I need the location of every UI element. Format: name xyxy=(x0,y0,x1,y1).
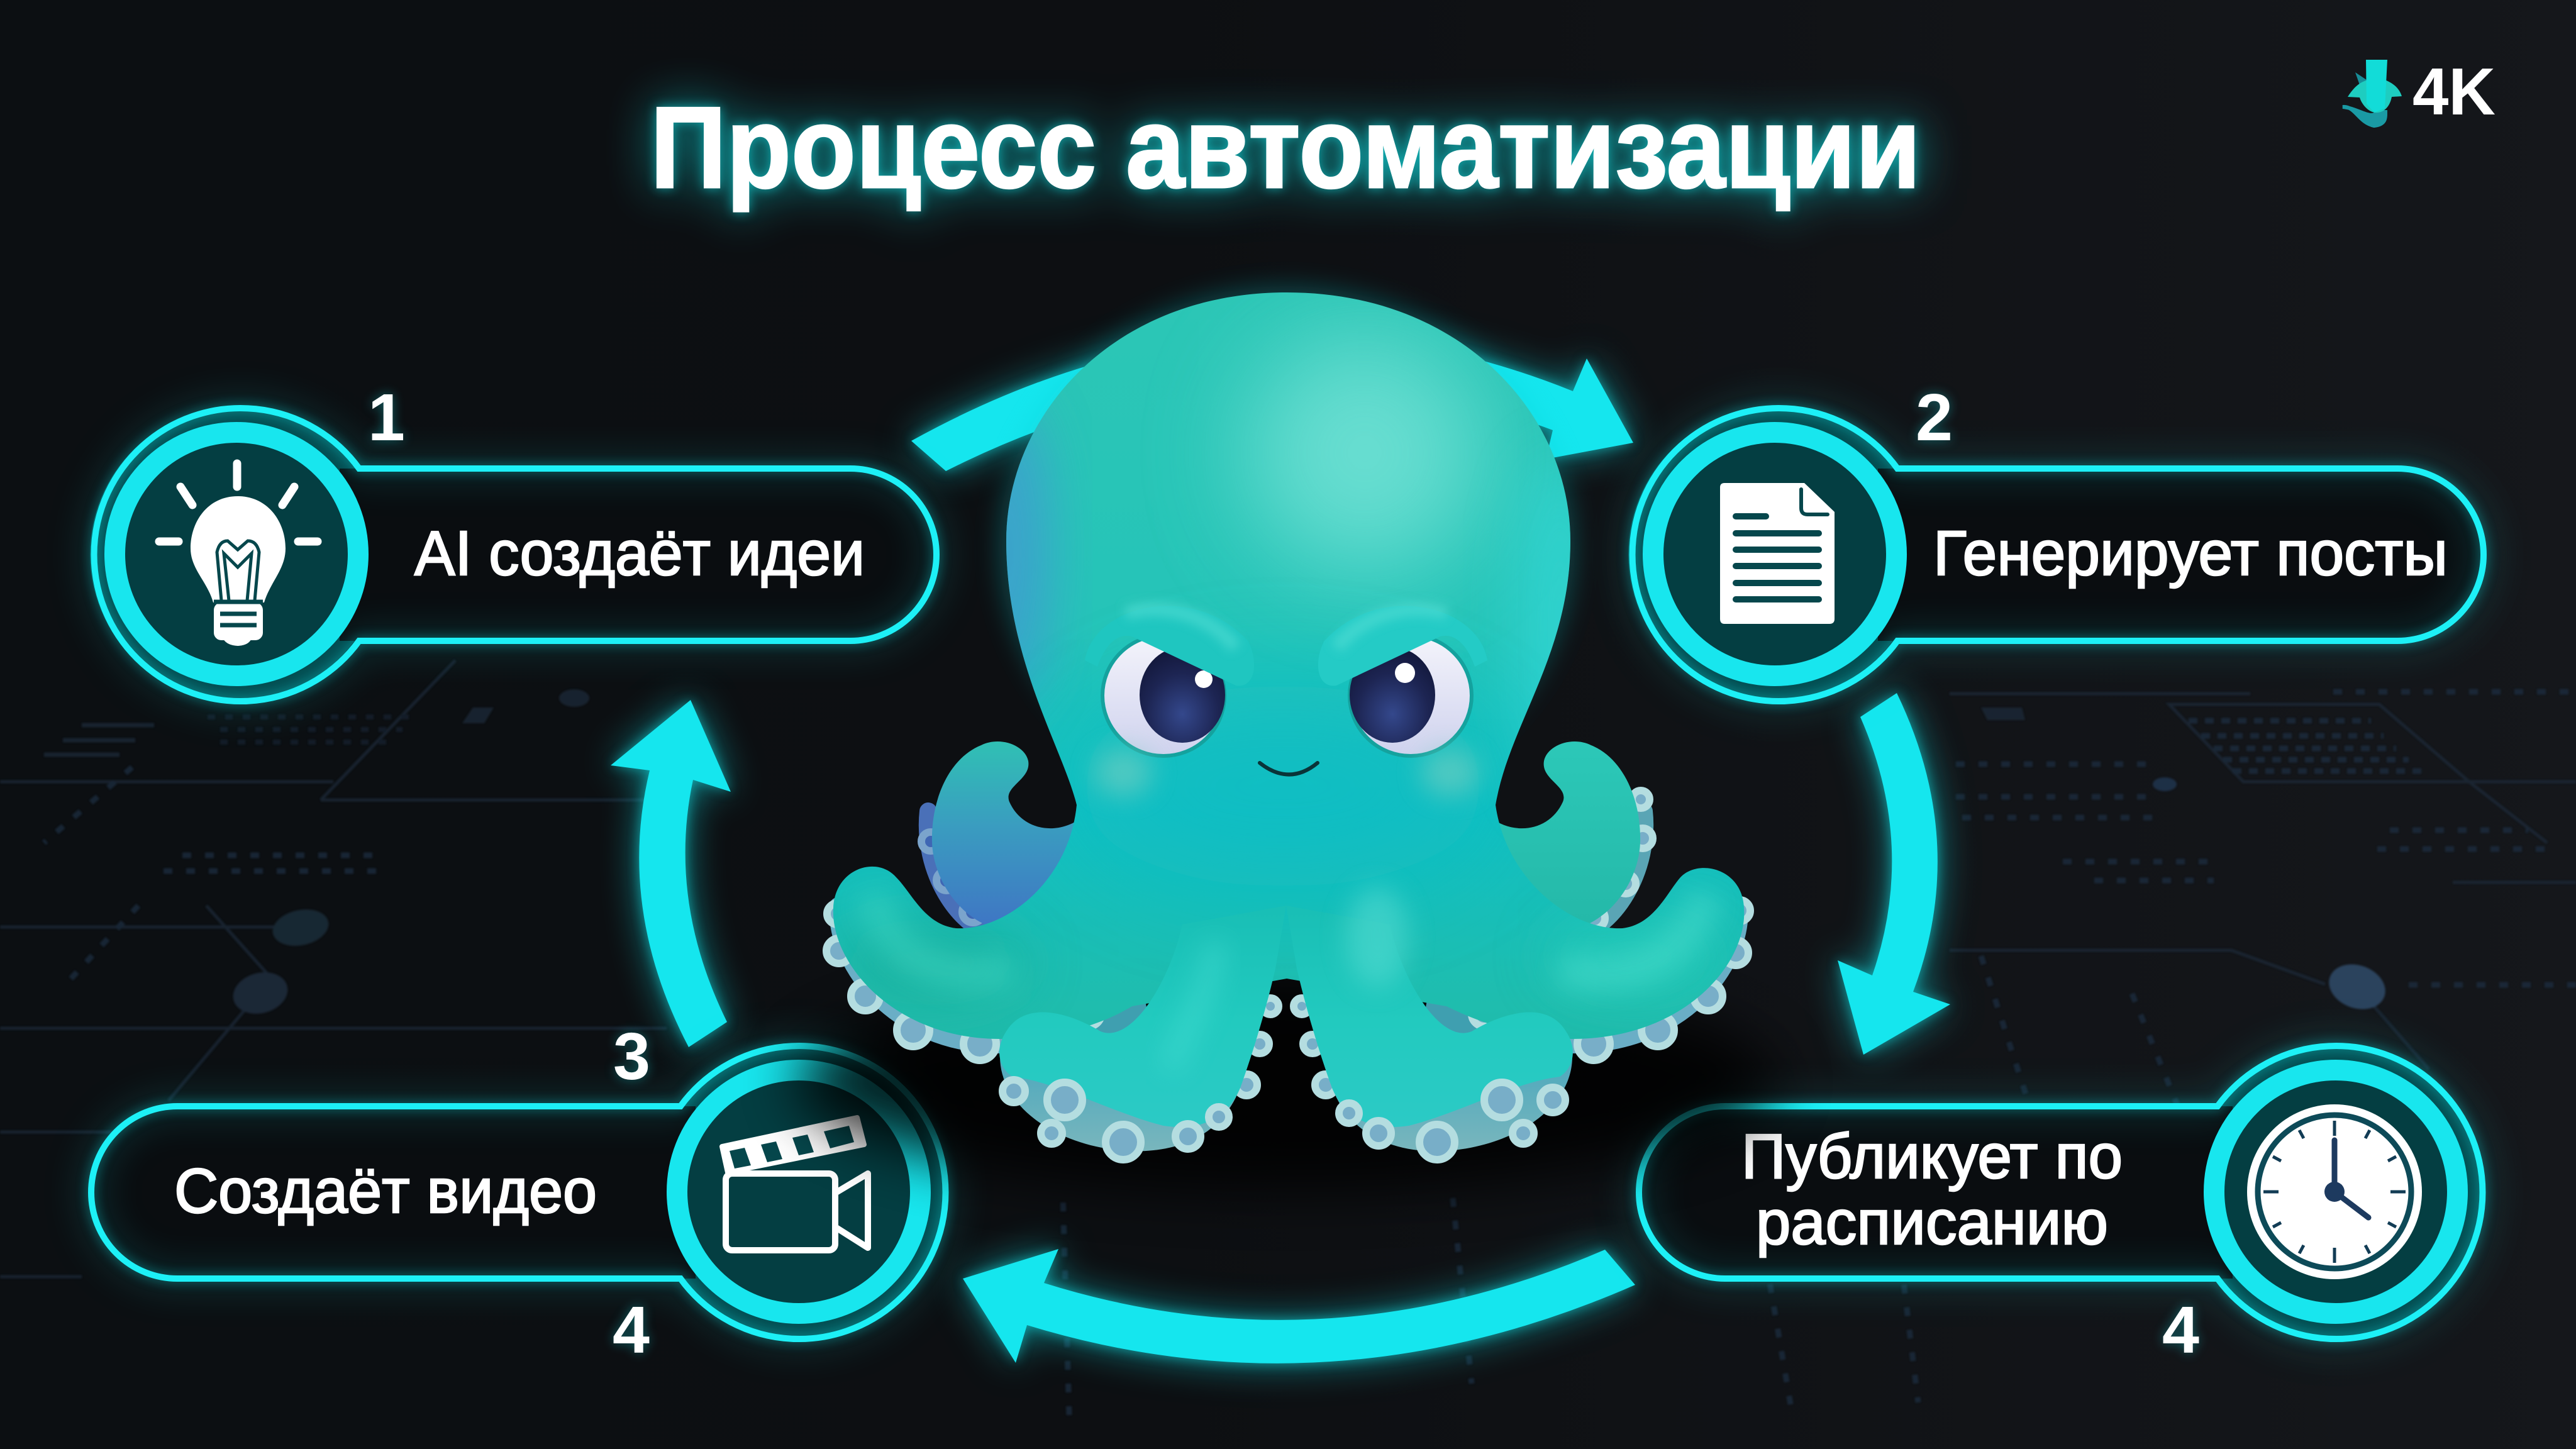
arrow: step 3 to step 4 xyxy=(963,1249,1635,1363)
number: 1: 1 xyxy=(368,380,405,455)
text: step 2 label: Генерирует посты xyxy=(1933,518,2448,589)
icon: document xyxy=(1720,483,1835,624)
side arm suckers xyxy=(826,900,1750,1096)
head and body xyxy=(830,292,1744,1039)
number: 4 right: 4 xyxy=(2162,1293,2199,1367)
title: Процесс автоматизации xyxy=(650,82,1921,212)
number: 2: 2 xyxy=(1916,380,1953,455)
front arm left xyxy=(999,906,1286,1151)
icon: light bulb xyxy=(159,464,318,646)
arrow: step 4 to step 1 xyxy=(611,700,731,1047)
ground shadow xyxy=(796,975,1777,1189)
panel: step 3 video xyxy=(91,1019,945,1367)
edge glow xyxy=(999,286,1575,808)
panel: step 4 schedule xyxy=(1639,1045,2482,1367)
text: step 4 label: Публикует по xyxy=(1741,1121,2123,1192)
brow highlights xyxy=(1126,609,1446,648)
octopus mascot xyxy=(796,286,1777,1189)
left eye xyxy=(1102,635,1225,756)
text: step 4 label xyxy=(1741,1121,2123,1258)
foot suckers xyxy=(1002,1080,1565,1160)
text: 4K: 4K xyxy=(2412,55,2496,129)
text: step 4 label: расписанию xyxy=(1756,1187,2108,1258)
arrow: step 2 to step 3 xyxy=(1838,693,1950,1055)
back arm right xyxy=(1478,741,1640,931)
icon: clock xyxy=(2247,1104,2422,1279)
number: 3: 3 xyxy=(613,1019,650,1094)
panel: step 1 AI ideas xyxy=(90,380,936,701)
icon: logo octopus xyxy=(2343,60,2402,126)
text: step 1 label: AI создаёт идеи xyxy=(414,518,865,589)
mouth xyxy=(1260,763,1318,775)
front arm right xyxy=(1286,887,1573,1151)
blush left xyxy=(1094,748,1152,796)
back arm left xyxy=(932,741,1094,931)
logo: 4K badge xyxy=(2343,55,2496,129)
side arm lips xyxy=(838,906,1740,1045)
under arms between side arms and feet xyxy=(969,962,1604,1069)
back arm suckers xyxy=(921,791,1653,929)
back arm lips xyxy=(928,811,1645,940)
text: step 3 label: Создаёт видео xyxy=(174,1156,597,1226)
panel: step 2 posts xyxy=(1628,380,2484,701)
icon: film clapper and camera xyxy=(722,1118,868,1250)
right eye xyxy=(1350,635,1472,756)
face xyxy=(1085,606,1487,796)
left brow xyxy=(1085,606,1254,686)
blush right xyxy=(1421,748,1479,796)
arrow: step 1 to step 2 xyxy=(911,335,1633,471)
number: 4 left: 4 xyxy=(613,1293,650,1367)
right brow xyxy=(1318,606,1487,686)
